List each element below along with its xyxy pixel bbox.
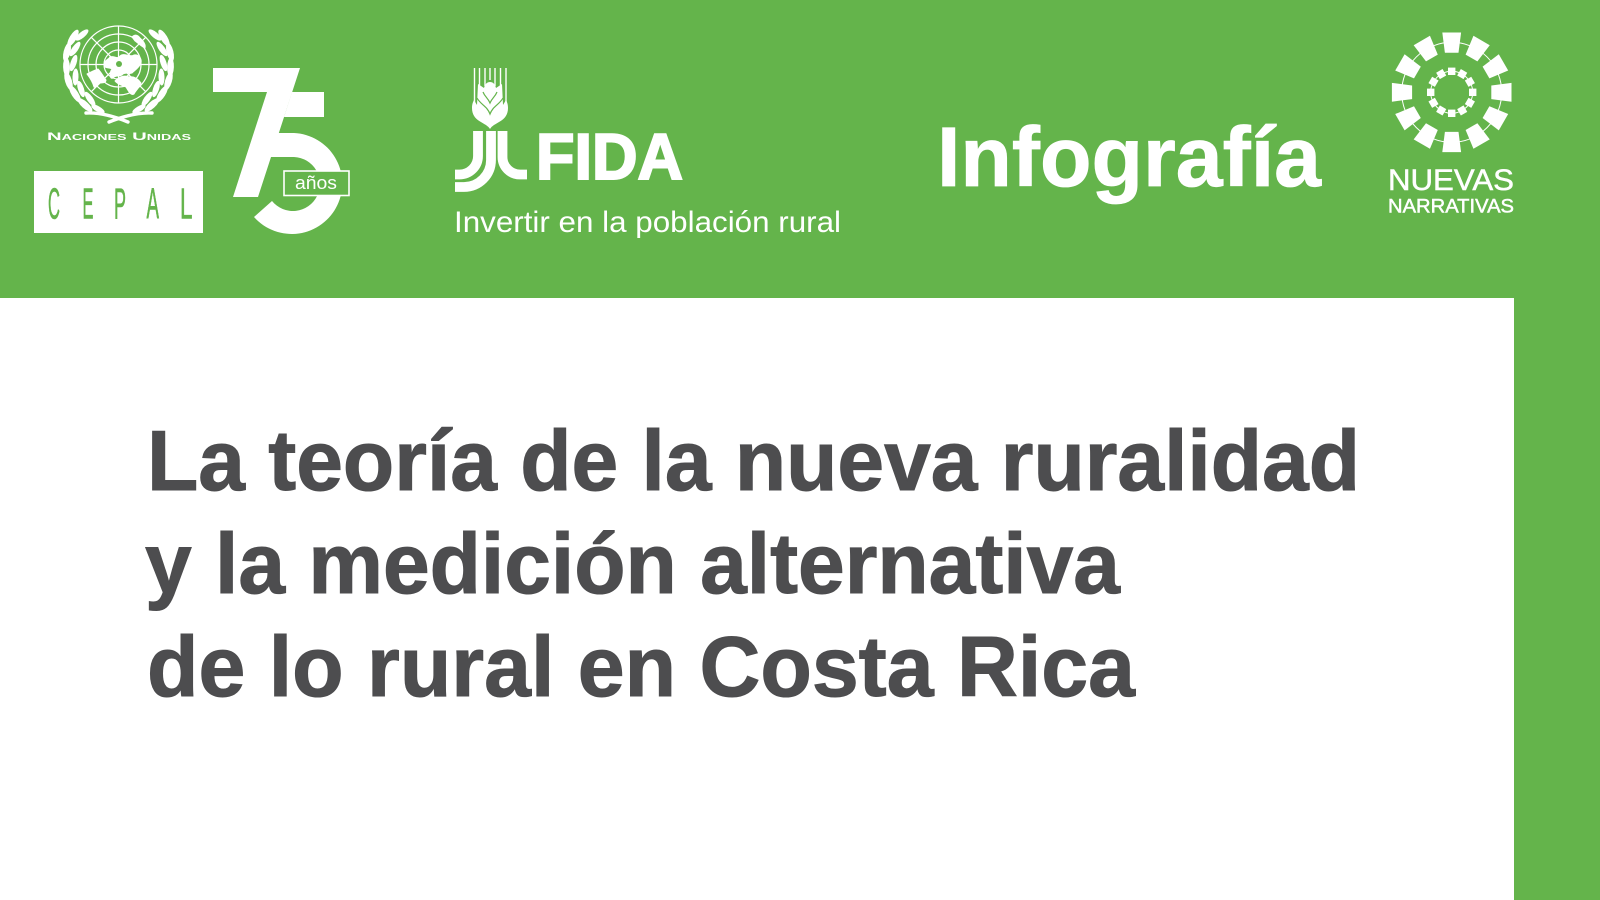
logo: 75 años: años (295, 172, 337, 193)
logo: CEPAL: A (146, 180, 159, 228)
icon: globe grid (80, 26, 157, 103)
logo: CEPAL: P (114, 180, 126, 228)
logo: Nuevas Narrativas (1388, 33, 1514, 218)
header green band (0, 0, 1600, 298)
icon: olive wreath left (61, 28, 106, 115)
number five (284, 92, 324, 117)
number seven (213, 68, 300, 197)
icon: ribbon (86, 113, 152, 122)
icon: outer ring (1392, 33, 1512, 152)
label box: años (284, 171, 349, 196)
logo: FIDA (454, 68, 841, 239)
logo: Naciones Unidas emblem (61, 26, 176, 122)
logo: CEPAL: L (180, 180, 192, 228)
title (145, 414, 1360, 715)
icon: wheat grains (472, 82, 508, 129)
title: de lo rural en Costa Rica (147, 620, 1136, 715)
title: y la medición alternativa (145, 517, 1121, 612)
logo: CEPAL: E (82, 180, 94, 228)
tagline: Invertir en la población rural (454, 206, 841, 239)
wordmark: FIDA: FIDA (536, 121, 683, 193)
heading: Infografía: Infografía (937, 110, 1322, 204)
icon: continents (87, 35, 145, 95)
title: La teoría de la nueva ruralidad (147, 414, 1360, 509)
icon: wheat awns (474, 68, 506, 104)
wordmark: Narrativas: NARRATIVAS (1388, 196, 1514, 218)
logo: CEPAL (34, 171, 203, 233)
text: Naciones Unidas: Naciones Unidas (47, 131, 192, 143)
icon: olive wreath right (131, 28, 176, 115)
logo: 75 años (213, 68, 349, 234)
right green band (1514, 0, 1600, 900)
icon: JJL strokes (455, 131, 527, 187)
logo: CEPAL: C (48, 180, 60, 228)
wordmark: Nuevas: NUEVAS (1388, 164, 1514, 197)
